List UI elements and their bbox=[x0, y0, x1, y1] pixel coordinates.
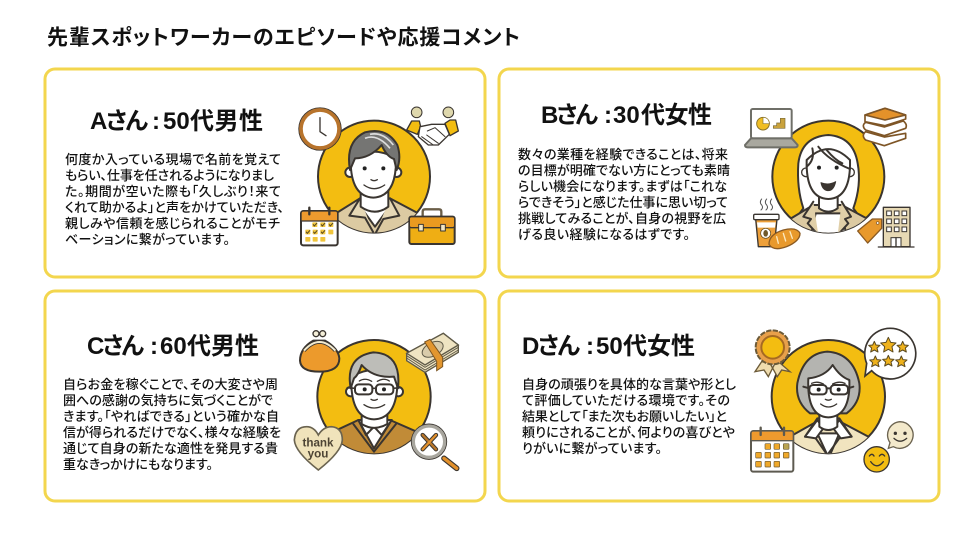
panel: A bbox=[45, 69, 485, 277]
heading: D: Dさん bbox=[522, 333, 581, 360]
text block: C: 囲への感謝の気持ちに気づくことがで bbox=[63, 393, 274, 408]
text block: C bbox=[63, 377, 281, 472]
heading: D: 代女性 bbox=[623, 333, 695, 360]
illustration: C: thank bbox=[302, 437, 334, 450]
heading: B: : bbox=[604, 102, 612, 129]
text block: A bbox=[65, 152, 284, 247]
heading: B: 30 bbox=[613, 102, 640, 129]
panel: D bbox=[499, 291, 939, 501]
heading: D: : bbox=[586, 333, 594, 360]
text block: D: りがいに繋がっています。 bbox=[522, 441, 662, 456]
text block: B: の目標が明確でない方にとっても素晴 bbox=[518, 163, 730, 178]
heading: A: Aさん bbox=[90, 108, 149, 135]
illustration: A bbox=[301, 107, 458, 245]
illustration: C bbox=[294, 331, 458, 470]
text block: D: 結果として「また次もお願いしたい」と bbox=[522, 409, 727, 424]
text block: C: きます。「やればできる」という確かな自 bbox=[63, 409, 279, 424]
text block: A: ベーションに繋がっています。 bbox=[65, 232, 230, 247]
heading: D bbox=[522, 333, 695, 360]
text block: D: て評価していただける環境です。その bbox=[522, 393, 730, 408]
heading: C: 代男性 bbox=[187, 333, 259, 360]
text block: D bbox=[522, 377, 736, 456]
heading: A: 50 bbox=[163, 108, 190, 135]
heading: C bbox=[87, 333, 259, 360]
heading: B: 代女性 bbox=[641, 102, 712, 129]
text block: B: げる良い経験になるはずです。 bbox=[518, 227, 690, 242]
text block: C: 信が得られるだけでなく、様々な経験を bbox=[63, 425, 281, 440]
illustration: C: you bbox=[308, 447, 328, 460]
heading: D: 50 bbox=[596, 333, 623, 360]
text block: A: もらい、仕事を任されるようになりまし bbox=[65, 168, 274, 183]
text block: A: た。期間が空いた際も「久しぶり！来て bbox=[65, 184, 281, 199]
text block: C: 重なきっかけにもなります。 bbox=[63, 457, 213, 472]
text block: D: 自身の頑張りを具体的な言葉や形とし bbox=[522, 377, 736, 392]
illustration: B bbox=[745, 108, 914, 249]
text block: B: らできそう」と感じた仕事に思い切って bbox=[518, 195, 728, 210]
text block: A: 何度か入っている現場で名前を覚えて bbox=[65, 152, 281, 167]
text block: C: 通じて自身の新たな適性を発見する貴 bbox=[63, 441, 278, 456]
panel: B bbox=[499, 69, 939, 277]
text block: C: 自らお金を稼ぐことで、その大変さや周 bbox=[63, 377, 278, 392]
heading: C: Cさん bbox=[87, 333, 145, 360]
text block: B bbox=[518, 147, 730, 242]
heading: A bbox=[90, 108, 263, 135]
heading: A: : bbox=[152, 108, 160, 135]
heading: B: Bさん bbox=[541, 102, 599, 129]
text block: B: 数々の業種を経験できることは、将来 bbox=[518, 147, 728, 162]
heading: B bbox=[541, 102, 712, 129]
text block: D: 頼りにされることが、何よりの喜びとや bbox=[522, 425, 735, 440]
illustration: D bbox=[751, 328, 916, 472]
heading: A: 代男性 bbox=[190, 108, 263, 135]
text block: A: くれて助かるよ」と声をかけていただき、 bbox=[65, 200, 284, 215]
heading: C: : bbox=[150, 333, 158, 360]
text block: B: 挑戦してみることが、自身の視野を広 bbox=[518, 211, 726, 226]
title: 先輩スポットワーカーのエピソードや応援コメント bbox=[47, 26, 520, 50]
text block: B: らしい機会になります。まずは「これな bbox=[518, 179, 727, 194]
panel: C bbox=[45, 291, 485, 501]
heading: C: 60 bbox=[160, 333, 187, 360]
text block: A: 親しみや信頼を感じられることがモチ bbox=[65, 216, 280, 231]
